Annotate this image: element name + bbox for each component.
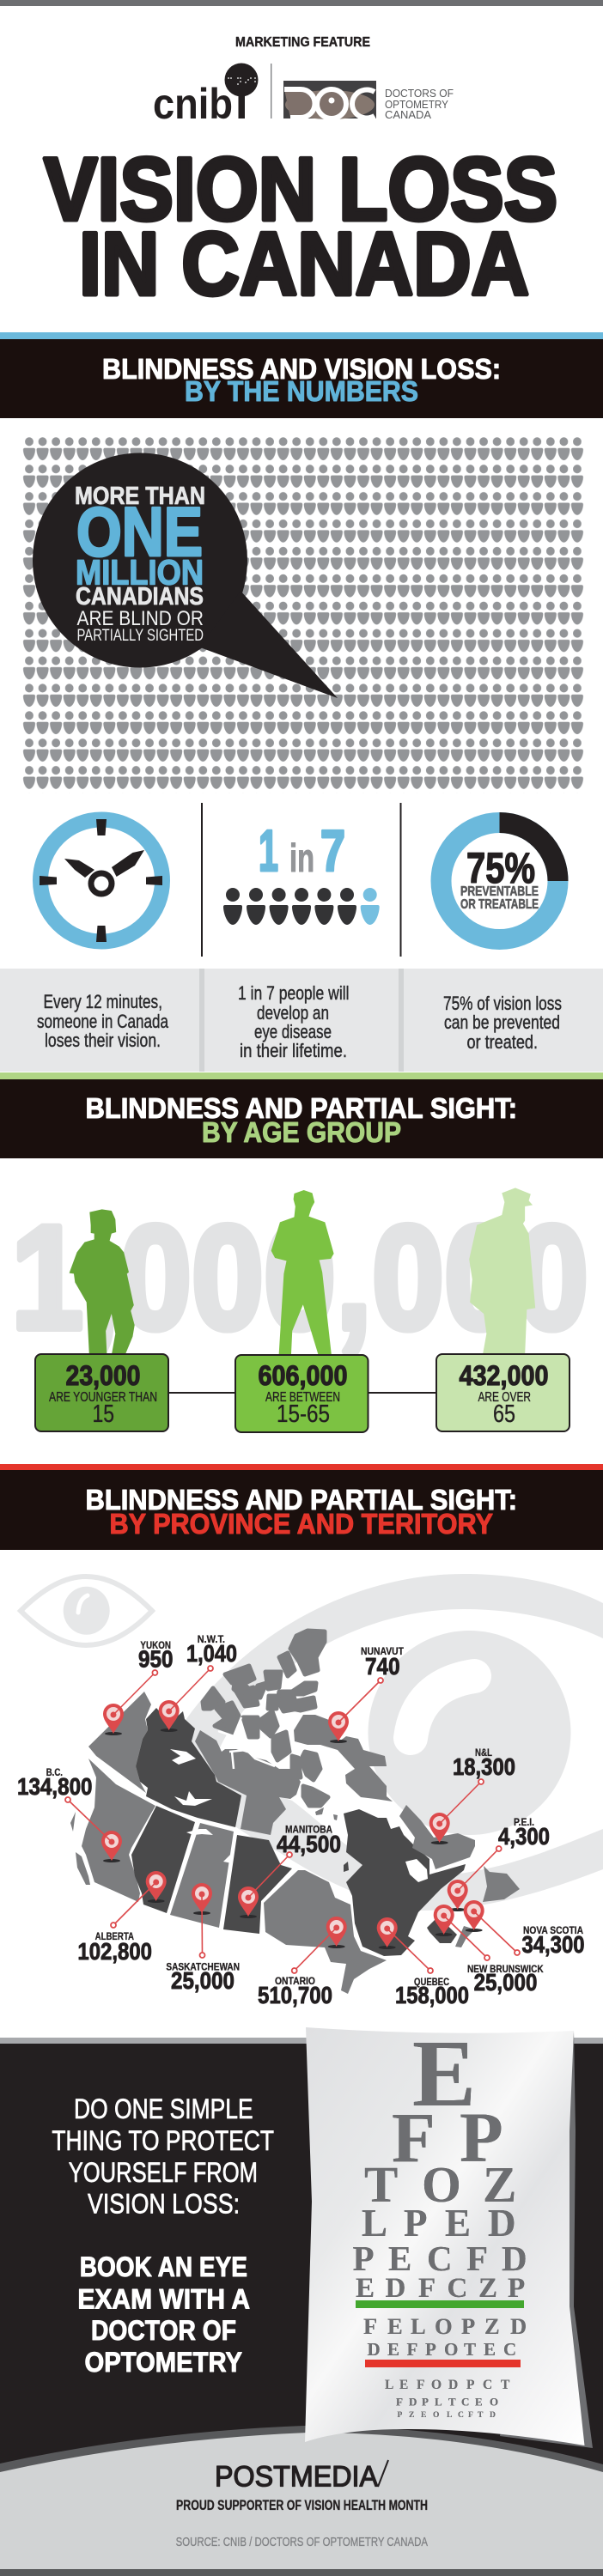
masthead: marketing feature label and logos [153, 35, 454, 128]
caption: 75 percent of vision loss: can be prevented [444, 1012, 560, 1033]
silhouette: adult [271, 1190, 334, 1355]
map marker: Ontario [292, 1917, 347, 1973]
label: Alberta 102,800: 102,800 [77, 1938, 152, 1965]
label: Manitoba 44,500: MANITOBA [285, 1824, 332, 1836]
province: British Columbia [70, 1759, 155, 1902]
green line [356, 2300, 524, 2308]
donut chart: 75 percent preventable: PREVENTABLE [460, 884, 539, 899]
age box: between 15 and 65: 15-65 [277, 1400, 330, 1428]
caption: 1 in 7 people: in their lifetime. [240, 1040, 347, 1061]
province: Alberta [131, 1806, 195, 1913]
age box: over 65: 432,000 [459, 1360, 548, 1391]
age box: over 65: ARE OVER [478, 1390, 531, 1405]
label: Yukon 950: 950 [138, 1645, 174, 1673]
caption: every 12 minutes [37, 991, 169, 1051]
age box: between 15 and 65: 606,000 [258, 1360, 347, 1391]
footer curved panel [0, 2426, 603, 2576]
speech bubble: more than one million canadians: ARE BLIND OR [77, 607, 204, 630]
label: Saskatchewan 25,000: 25,000 [171, 1967, 234, 1994]
chart row 9: LEFODPCT [385, 2378, 510, 2392]
chart row 4: LPED [362, 2202, 515, 2245]
call-to-action panel background [0, 2038, 603, 2490]
label: B.C. 134,800: B.C. [46, 1766, 63, 1778]
map marker: N.W.T. [159, 1666, 213, 1732]
map marker: Nunavut [328, 1678, 383, 1743]
age box: younger than 15: 15 [93, 1400, 114, 1428]
logo: doctors of optometry canada: OPTOMETRY [385, 98, 448, 111]
caption: 1 in 7 people [238, 982, 349, 1061]
donut chart: 75 percent preventable: OR TREATABLE [460, 897, 539, 912]
label: Yukon 950: YUKON [140, 1639, 171, 1651]
speech bubble: more than one million canadians: PARTIALLY SIGHTED [77, 627, 204, 645]
title [44, 140, 557, 314]
call to action text: BOOK AN EYE [80, 2251, 247, 2282]
territory: Nunavut and arctic islands [195, 1631, 393, 1835]
label: N.W.T. 1,040 [186, 1633, 237, 1667]
section header: by age group: BY AGE GROUP [202, 1117, 401, 1149]
age box: between 15 and 65 [235, 1355, 368, 1432]
label: Nunavut 740: NUNAVUT [361, 1645, 404, 1657]
logo: doctors of optometry canada: CANADA [385, 108, 431, 121]
label: Nova Scotia 34,300: 34,300 [522, 1931, 584, 1958]
label: Manitoba 44,500: 44,500 [277, 1831, 341, 1857]
silhouette: child [70, 1209, 135, 1355]
label: N and L 18,300: N&L [475, 1747, 492, 1759]
age box: over 65 [436, 1354, 570, 1431]
age box: younger than 15 [35, 1354, 168, 1431]
province: Ontario [264, 1870, 387, 1994]
speech bubble: more than one million canadians [33, 453, 338, 698]
chart row 10: FDPLTCEO [396, 2396, 498, 2408]
background: large eye [163, 1574, 603, 1911]
caption: 1 in 7 people: develop an [257, 1002, 329, 1024]
chart row 6: EDFCZP [356, 2273, 525, 2304]
logo: cnib tree [153, 64, 258, 128]
label: Nova Scotia 34,300: NOVA SCOTIA [523, 1924, 583, 1936]
caption: 1 in 7 people: 1 in 7 people will [238, 982, 349, 1004]
map marker: Saskatchewan [192, 1883, 212, 1958]
postmedia logo: POSTMEDIA [215, 2461, 378, 2494]
chart row 3: TOZ [364, 2156, 516, 2213]
icon: clock [40, 819, 162, 942]
section header: by province and territory: BLINDNESS AND PARTIAL SIGHT: [86, 1485, 517, 1516]
section header: by province and territory [0, 1464, 603, 1550]
call to action text: DO ONE SIMPLE [74, 2093, 253, 2124]
caption: every 12 minutes: Every 12 minutes, [43, 991, 162, 1012]
call to action text: YOURSELF FROM [69, 2157, 258, 2188]
label: Saskatchewan 25,000: SASKATCHEWAN [166, 1961, 240, 1973]
map of Canada [70, 1631, 520, 1994]
territory: Northwest Territories [136, 1708, 241, 1827]
chart row 11: PZEOLCFTD [397, 2411, 496, 2420]
label: Nunavut 740 [361, 1645, 404, 1680]
chart row 1: E [412, 2021, 476, 2127]
label: New Brunswick 25,000: 25,000 [474, 1969, 537, 1996]
1 in 7 statistic with people icons: 1 [259, 818, 278, 884]
province: Newfoundland and Labrador [399, 1805, 520, 1902]
map marker: Nova Scotia [464, 1900, 520, 1955]
label: Quebec 158,000: QUEBEC [414, 1976, 449, 1988]
map marker: Alberta [111, 1871, 167, 1928]
call to action text: EXAM WITH A [77, 2284, 250, 2315]
age box: between 15 and 65: ARE BETWEEN [265, 1390, 340, 1405]
section header: by age group [0, 1072, 603, 1158]
label: B.C. 134,800: 134,800 [17, 1773, 93, 1800]
call to action text: DOCTOR OF [91, 2315, 236, 2346]
label: N and L 18,300 [453, 1747, 515, 1780]
speech bubble: more than one million canadians: MILLION [76, 553, 204, 592]
chart row 7: FELOPZD [363, 2313, 527, 2339]
call to action text: THING TO PROTECT [52, 2125, 274, 2156]
caption: 1 in 7 people: eye disease [254, 1021, 332, 1042]
1 in 7 statistic with people icons: 7 [320, 818, 345, 884]
label: Nunavut 740: 740 [365, 1653, 400, 1680]
caption: every 12 minutes: loses their vision. [45, 1030, 161, 1051]
label: P.E.I. 4,300: 4,300 [498, 1823, 550, 1850]
silhouettes: three age groups [70, 1188, 535, 1355]
silhouette: senior [469, 1188, 535, 1355]
label: N.W.T. 1,040: N.W.T. [198, 1633, 225, 1645]
source line: SOURCE: CNIB / DOCTORS OF OPTOMETRY CANADA [176, 2536, 428, 2549]
caption: 75 percent of vision loss: or treated. [467, 1031, 538, 1053]
age box: younger than 15: 23,000 [65, 1360, 141, 1391]
label: New Brunswick 25,000: NEW BRUNSWICK [467, 1963, 544, 1975]
section header: by the numbers: BY THE NUMBERS [185, 376, 418, 408]
speech bubble: more than one million canadians: CANADIANS [76, 583, 204, 611]
call to action text: VISION LOSS: [88, 2188, 240, 2219]
speech bubble: more than one million canadians: MORE THAN [75, 483, 205, 510]
donut chart: 75 percent preventable [442, 823, 558, 939]
speech bubble: more than one million canadians: ONE [76, 494, 203, 571]
provinces: New Brunswick and Nova Scotia [427, 1917, 475, 1947]
map marker: Manitoba [238, 1852, 292, 1918]
section header: by the numbers [0, 332, 603, 418]
title: IN CANADA [79, 215, 529, 314]
caption: 75 percent of vision loss: 75% of vision loss [443, 993, 562, 1014]
province: Saskatchewan [170, 1823, 236, 1928]
logo: doctors of optometry canada [283, 81, 454, 121]
province: Quebec [344, 1809, 466, 1956]
chart row 5: PECFD [352, 2239, 527, 2278]
label: N and L 18,300: 18,300 [453, 1753, 515, 1780]
map marker: Quebec [377, 1917, 433, 1973]
label: Ontario 510,700: ONTARIO [275, 1975, 315, 1987]
age box: over 65: 65 [493, 1400, 515, 1428]
label: N.W.T. 1,040: 1,040 [186, 1640, 237, 1667]
label: Quebec 158,000: 158,000 [395, 1982, 469, 2008]
1 in 7 statistic with people icons [223, 818, 380, 925]
red line [365, 2360, 521, 2367]
map marker: New Brunswick [434, 1905, 490, 1960]
label: P.E.I. 4,300: P.E.I. [514, 1816, 534, 1828]
eye chart poster [305, 2021, 593, 2448]
marketing feature label: MARKETING FEATURE [235, 35, 370, 50]
chart row 8: DEFPOTEC [368, 2339, 516, 2360]
map marker: Yukon [103, 1670, 157, 1735]
section header: by age group: BLINDNESS AND PARTIAL SIGHT: [86, 1093, 517, 1125]
pictogram grid of people [22, 437, 584, 793]
label: Alberta 102,800: ALBERTA [95, 1930, 134, 1942]
label: Alberta 102,800 [77, 1930, 152, 1965]
map marker: B.C. [65, 1797, 122, 1862]
caption: every 12 minutes: someone in Canada [37, 1011, 169, 1032]
province: Manitoba [223, 1835, 292, 1934]
age box: younger than 15: ARE YOUNGER THAN [49, 1390, 157, 1405]
call to action text [52, 2093, 274, 2378]
donut chart: 75 percent preventable: 75% [466, 844, 535, 892]
chart row 2: FP [392, 2098, 503, 2177]
icon: small eye [21, 1577, 152, 1645]
map marker: N and L [429, 1779, 484, 1844]
title: VISION LOSS [44, 140, 557, 240]
caption: 75 percent of vision loss [443, 993, 562, 1053]
label: Nova Scotia 34,300 [522, 1924, 584, 1958]
logo: doctors of optometry canada: DOCTORS OF [385, 87, 454, 100]
province: Yukon [88, 1692, 151, 1793]
label: Ontario 510,700: 510,700 [258, 1982, 332, 2008]
section header: by the numbers: BLINDNESS AND VISION LOSS: [102, 354, 501, 386]
grey panel: three fact captions [0, 969, 603, 1072]
supporter line: PROUD SUPPORTER OF VISION HEALTH MONTH [176, 2498, 428, 2513]
call to action text: OPTOMETRY [84, 2347, 242, 2378]
map marker: P.E.I. [448, 1846, 502, 1911]
1 in 7 statistic with people icons: in [289, 835, 314, 880]
logo: cnib tree: cnib [153, 80, 233, 128]
section header: by province and territory: BY PROVINCE AND TERITORY [110, 1509, 493, 1540]
